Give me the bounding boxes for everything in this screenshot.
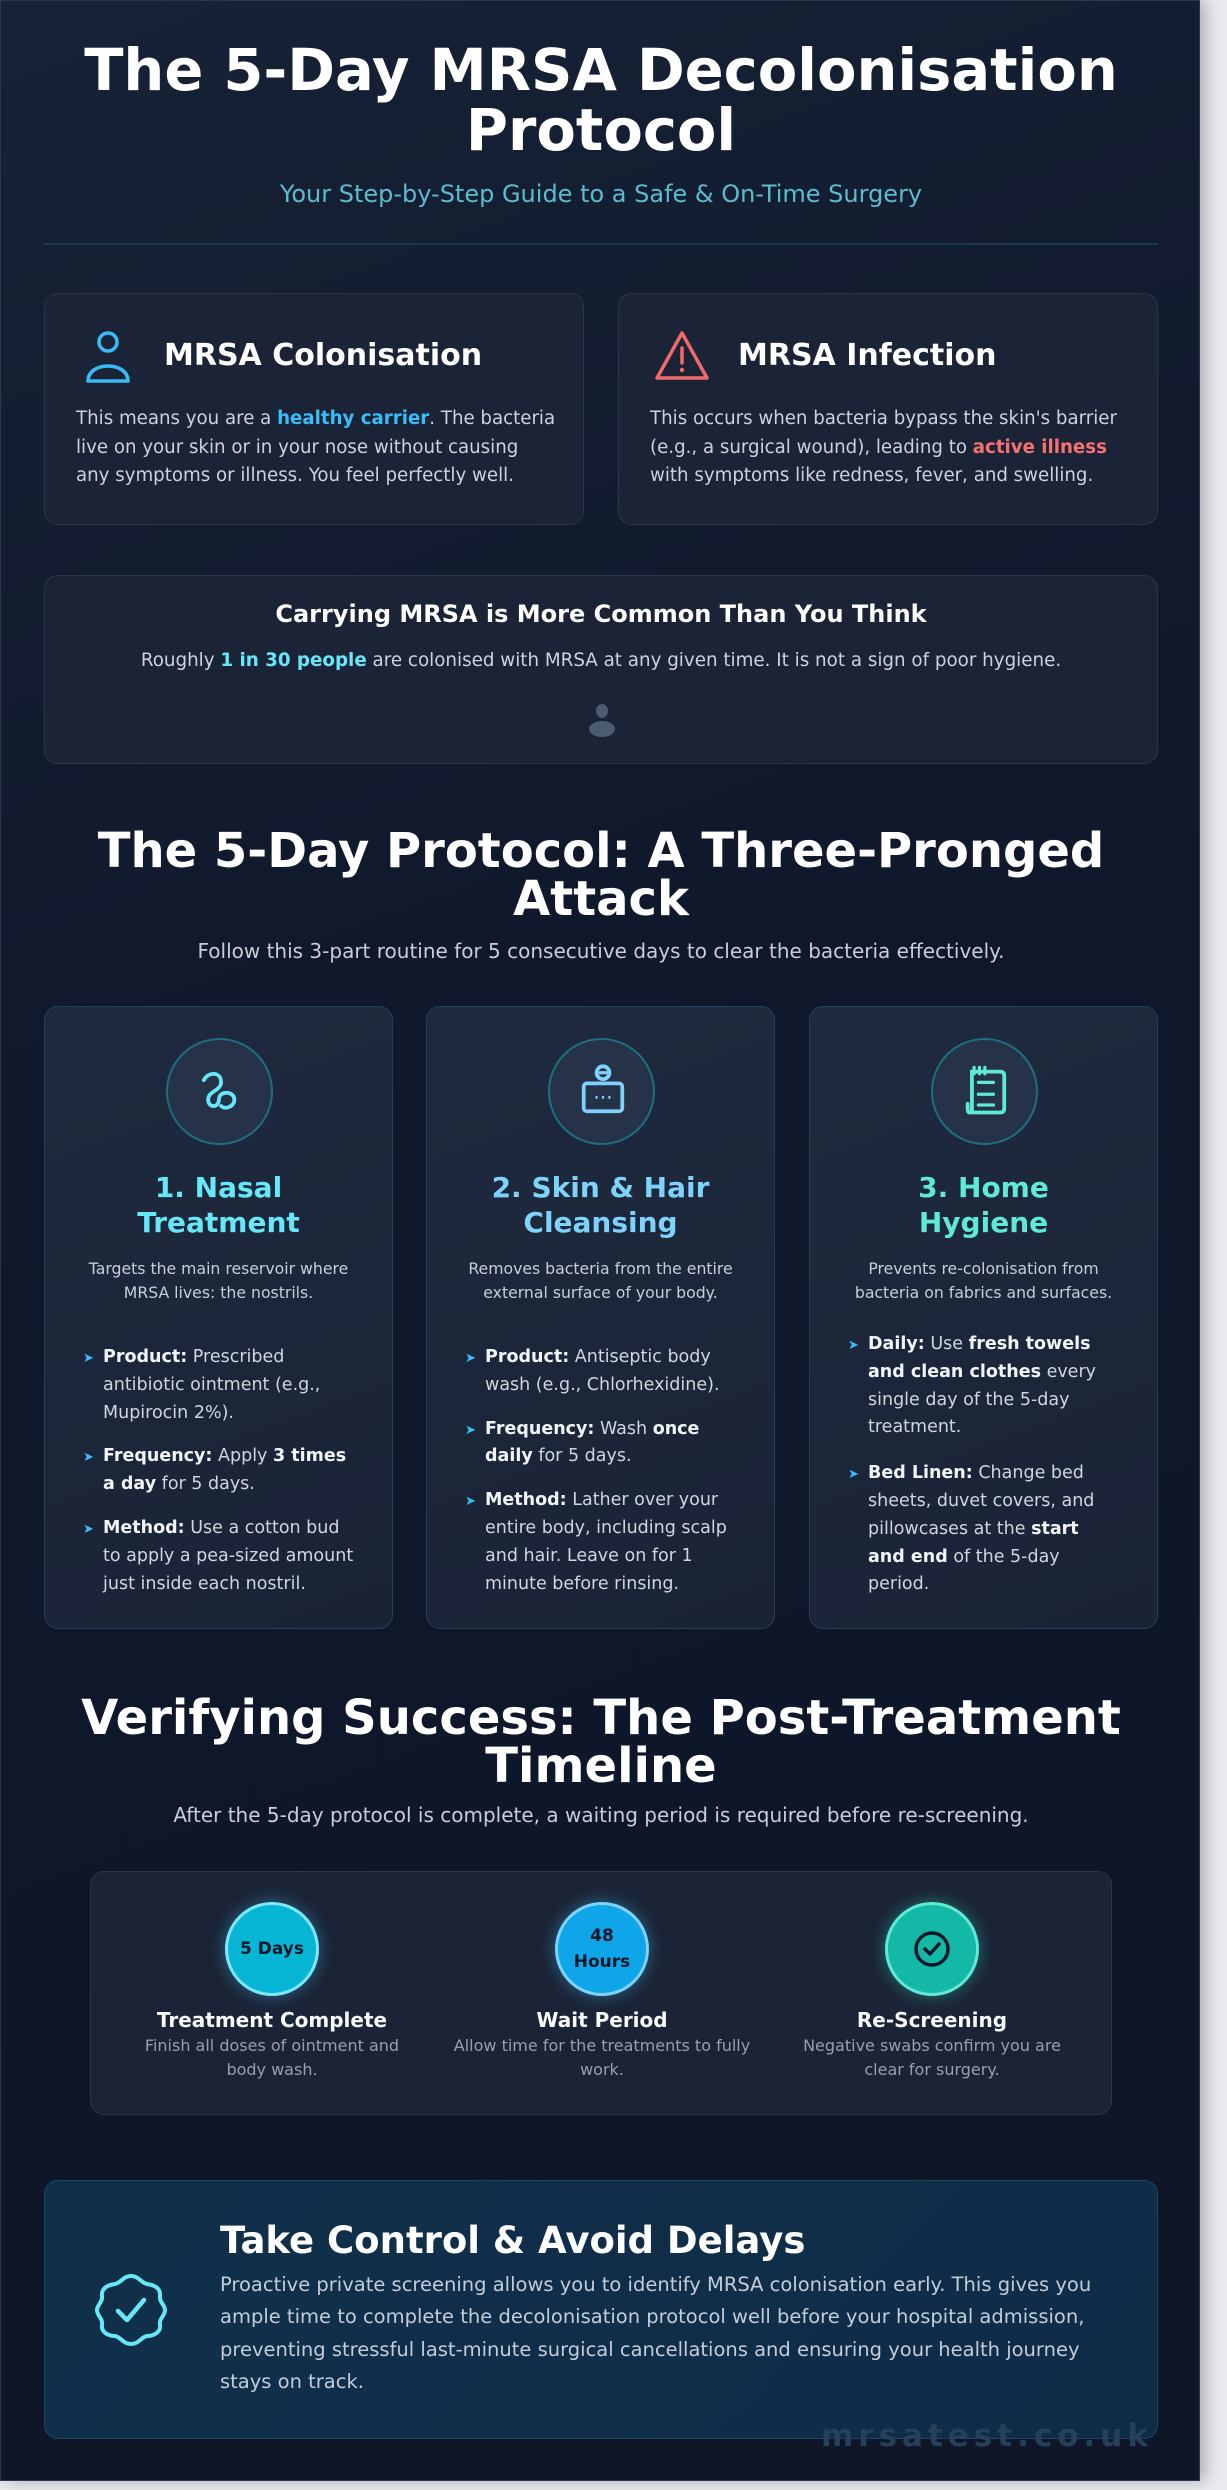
heading: Take Control & Avoid Delays	[220, 2219, 805, 2262]
panel: nasal	[44, 1006, 393, 1629]
step: wait: Allow time for the treatments to fully work.	[454, 2036, 750, 2079]
panel: common	[44, 575, 1158, 764]
heading: protocol: Attack	[513, 871, 689, 927]
step: wait: Wait Period	[536, 2008, 668, 2032]
icon: badge check	[95, 2274, 167, 2346]
text: Roughly 1 in 30 people are colonised with MRSA at any given time. It is not a sign of poor hygiene.	[141, 650, 1061, 671]
heading: MRSA Infection	[738, 338, 997, 373]
heading: Cleansing	[523, 1206, 678, 1239]
panel: home	[809, 1006, 1158, 1629]
heading: 3. Home	[918, 1171, 1049, 1204]
bullets	[84, 1347, 353, 1594]
bullets: Method: Use a cotton bud to apply a pea-sized amount just inside each nostril.	[103, 1518, 353, 1594]
heading: 2. Skin & Hair	[492, 1171, 709, 1204]
title: Protocol	[466, 97, 736, 164]
heading: protocol: The 5-Day Protocol: A Three-Pronged	[98, 823, 1104, 879]
icon: nose	[166, 1038, 273, 1145]
step: wait	[454, 1893, 750, 2079]
subtitle: Your Step-by-Step Guide to a Safe & On-Time Surgery	[280, 180, 922, 208]
heading: Treatment	[137, 1206, 300, 1239]
panel: timeline	[90, 1871, 1112, 2115]
heading: verifying: Timeline	[485, 1738, 717, 1794]
heading	[137, 1171, 300, 1239]
step: treatment complete: Finish all doses of ointment and body wash.	[145, 2036, 399, 2079]
heading: MRSA Colonisation	[164, 338, 482, 373]
desc: Removes bacteria from the entire external surface of your body.	[468, 1259, 733, 1302]
bullets: Frequency: Wash once daily for 5 days.	[485, 1419, 699, 1466]
title	[84, 37, 1118, 164]
text	[76, 408, 555, 486]
bullets	[850, 1334, 1096, 1594]
heading: 1. Nasal	[155, 1171, 282, 1204]
heading: protocol	[98, 823, 1104, 927]
title: The 5-Day MRSA Decolonisation	[84, 37, 1118, 104]
icon: soap	[548, 1038, 655, 1145]
panel: colonisation	[44, 293, 584, 525]
text: This means you are a healthy carrier. The bacteria	[76, 408, 555, 429]
callout: take control	[44, 2180, 1158, 2439]
subtitle: Follow this 3-part routine for 5 consecutive days to clear the bacteria effectively.	[197, 939, 1004, 963]
step: treatment complete: 5 Days	[240, 1939, 304, 1959]
bullets: Frequency: Apply 3 times a day for 5 days.	[103, 1446, 346, 1494]
panel: skin	[426, 1006, 775, 1629]
heading	[918, 1171, 1049, 1239]
panel: infection	[618, 293, 1158, 525]
bullets: Product: Antiseptic body wash (e.g., Chlorhexidine).	[485, 1347, 720, 1395]
step: re-screening: Re-Screening	[857, 2008, 1007, 2032]
heading	[492, 1171, 710, 1239]
text: Proactive private screening allows you to identify MRSA colonisation early. This gives you ample time to complete the decolonisation protocol well before your hospital admission, preventing stressful last-minute surgical cancellations and ensuring your health journey stays on track.	[220, 2273, 1091, 2393]
watermark: mrsatest.co.uk	[821, 2418, 1153, 2454]
icon: person	[86, 331, 130, 383]
text: This occurs when bacteria bypass the skin's barrier (e.g., a surgical wound), leading to active illness with symptoms like redness, fever, and swelling.	[650, 408, 1117, 486]
bullets: Method: Lather over your entire body, including scalp and hair. Leave on for 1 minute before rinsing.	[485, 1490, 727, 1594]
heading: Carrying MRSA is More Common Than You Think	[275, 600, 927, 628]
step: wait: Hours	[574, 1952, 630, 1972]
desc: Targets the main reservoir where MRSA lives: the nostrils.	[89, 1259, 348, 1302]
icon: notepad	[931, 1038, 1038, 1145]
desc: Prevents re-colonisation from bacteria on fabrics and surfaces.	[855, 1259, 1112, 1302]
step: wait: 48	[590, 1926, 614, 1946]
step: re-screening	[803, 1893, 1061, 2079]
icon: warning	[655, 331, 709, 380]
step: re-screening: Negative swabs confirm you are clear for surgery.	[803, 2036, 1061, 2079]
bullets	[466, 1347, 727, 1594]
step: treatment complete	[145, 1893, 399, 2079]
heading: verifying: Verifying Success: The Post-Treatment	[81, 1690, 1121, 1746]
text: live on your skin or in your nose without causing	[76, 436, 518, 458]
subtitle: After the 5-day protocol is complete, a waiting period is required before re-screening.	[173, 1803, 1029, 1827]
bullets: Daily: Use fresh towels and clean clothes every single day of the 5-day treatment.	[868, 1334, 1096, 1437]
icon: person	[589, 704, 615, 737]
bullets: Bed Linen: Change bed sheets, duvet covers, and pillowcases at the start and end of the 5-day period.	[868, 1463, 1094, 1594]
heading: verifying	[81, 1690, 1121, 1794]
bullets: Product: Prescribed antibiotic ointment (e.g., Mupirocin 2%).	[103, 1347, 320, 1423]
step: treatment complete: Treatment Complete	[157, 2008, 387, 2032]
heading: Hygiene	[919, 1206, 1048, 1239]
text: any symptoms or illness. You feel perfectly well.	[76, 465, 514, 486]
